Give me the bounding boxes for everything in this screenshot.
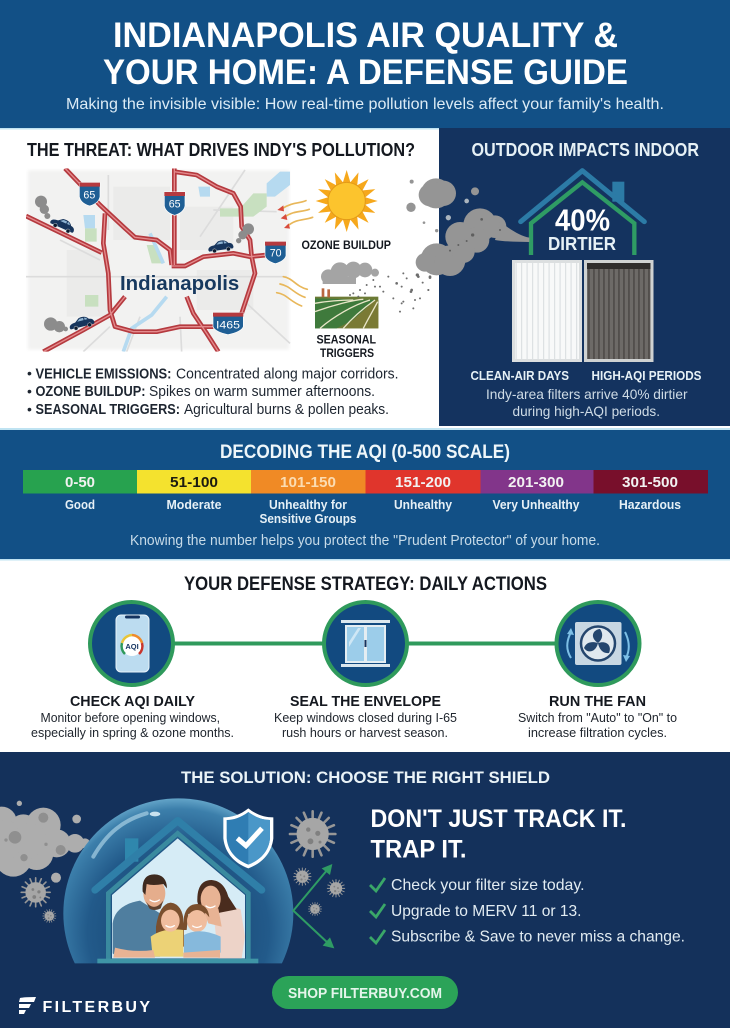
40% dirtier stat: 40% (555, 202, 610, 238)
connector line (170, 642, 560, 646)
icon: phone with AQI gauge: AQI (125, 642, 139, 651)
panel: outdoor impacts indoor (401, 128, 730, 426)
call to action headline: TRAP IT. (370, 836, 466, 864)
panel: the threat (0, 128, 439, 429)
button: shop filterbuy (272, 976, 458, 1009)
filter note: Indy-area filters arrive 40% dirtier (486, 386, 688, 402)
step description (518, 711, 677, 740)
panel: the solution (0, 752, 730, 1028)
icon: shield with check (223, 808, 273, 868)
AQI category labels: Good (65, 498, 95, 512)
family (113, 874, 245, 958)
step description (274, 711, 457, 740)
highway shields: 65 (169, 199, 181, 211)
step description: Monitor before opening windows, (40, 711, 220, 725)
AQI scale bar: 151-200 (395, 475, 451, 491)
AQI scale bar: 301-500 (622, 475, 678, 491)
city label: Indianapolis (120, 272, 239, 295)
call to action headline (370, 805, 626, 864)
seasonal triggers label: TRIGGERS (320, 346, 374, 360)
checklist: Check your filter size today. (391, 877, 584, 894)
cars with exhaust (35, 196, 254, 332)
title: YOUR HOME: A DEFENSE GUIDE (103, 53, 628, 92)
title (103, 16, 628, 92)
checklist (370, 877, 685, 946)
threat bullet list: • (27, 383, 32, 399)
highway shields (79, 183, 286, 335)
threat heading: THE THREAT: WHAT DRIVES INDY'S POLLUTION? (27, 140, 415, 160)
map of Indianapolis (26, 168, 290, 352)
subtitle: Making the invisible visible: How real-time pollution levels affect your family's health. (66, 96, 664, 113)
panel: decoding the AQI (0, 428, 730, 560)
threat bullet list: SEASONAL TRIGGERS: (36, 402, 180, 418)
icon: farm field with smoke (277, 262, 431, 328)
AQI category labels: Moderate (166, 498, 222, 512)
protective bubble with house and family (63, 798, 294, 964)
icon: sun with heat arrows (277, 169, 379, 233)
step title: SEAL THE ENVELOPE (290, 693, 441, 710)
AQI category labels: Unhealthy for (269, 498, 347, 512)
threat bullet list: Agricultural burns & pollen peaks. (184, 402, 389, 418)
step title: CHECK AQI DAILY (70, 693, 195, 710)
seasonal triggers label: SEASONAL (316, 332, 376, 346)
AQI heading: DECODING THE AQI (0-500 SCALE) (220, 442, 510, 463)
house (95, 821, 262, 963)
call to action headline: DON'T JUST TRACK IT. (370, 805, 626, 833)
icon: house outline (521, 171, 644, 255)
step description: especially in spring & ozone months. (31, 726, 234, 740)
filter captions (470, 368, 702, 383)
AQI scale bar: 201-300 (508, 475, 564, 491)
smoke cloud entering house (401, 178, 529, 309)
highway shields: 65 (83, 189, 95, 201)
40% dirtier stat: DIRTIER (548, 233, 616, 254)
highway shields: I465 (216, 319, 240, 331)
AQI category labels: Unhealthy (394, 498, 452, 512)
icon: fan (556, 602, 640, 685)
AQI category labels (65, 498, 681, 526)
filter captions: CLEAN-AIR DAYS (470, 368, 569, 383)
threat bullet list: VEHICLE EMISSIONS: (36, 366, 172, 382)
AQI category labels: Very Unhealthy (492, 498, 580, 512)
seasonal triggers label (316, 332, 376, 360)
step: check AQI (31, 602, 234, 740)
AQI scale bar: 0-50 (65, 475, 95, 491)
dirty filter (584, 260, 654, 362)
panel: daily actions (0, 559, 730, 752)
filter note (486, 386, 688, 419)
AQI scale bar: 101-150 (280, 475, 336, 491)
threat bullet list: • (27, 401, 32, 417)
icon: phone with AQI gauge (90, 602, 173, 685)
AQI category labels: Hazardous (619, 498, 681, 512)
highway shields: 70 (270, 248, 282, 260)
AQI scale bar: 51-100 (170, 475, 218, 491)
button: shop filterbuy: SHOP FILTERBUY.COM (288, 986, 442, 1002)
filter captions: HIGH-AQI PERIODS (592, 368, 702, 383)
logo: filterbuy: FILTERBUY (42, 999, 150, 1016)
title: INDIANAPOLIS AIR QUALITY & (113, 16, 618, 55)
step description: Keep windows closed during I-65 (274, 711, 457, 725)
threat bullet list: Spikes on warm summer afternoons. (149, 384, 375, 400)
step: run the fan (518, 602, 677, 740)
AQI category labels: Sensitive Groups (260, 512, 357, 526)
step description: increase filtration cycles. (528, 726, 667, 740)
step description: Switch from "Auto" to "On" to (518, 711, 677, 725)
threat bullet list: • (27, 365, 32, 381)
pollution cloud and particles (0, 801, 90, 923)
daily actions heading: YOUR DEFENSE STRATEGY: DAILY ACTIONS (184, 574, 547, 595)
threat bullet list (27, 365, 398, 418)
clean filter (512, 260, 582, 362)
step description (31, 711, 234, 740)
AQI scale bar (23, 470, 708, 494)
header band (0, 0, 730, 128)
40% dirtier stat (548, 202, 616, 254)
step: seal the envelope (274, 602, 457, 740)
threat bullet list: OZONE BUILDUP: (36, 384, 146, 400)
deflected viruses and arrows (290, 811, 345, 948)
threat bullet list: Concentrated along major corridors. (176, 366, 398, 382)
icon: window (324, 602, 407, 685)
outdoor heading: OUTDOOR IMPACTS INDOOR (472, 140, 699, 160)
ozone label: OZONE BUILDUP (302, 238, 391, 252)
filter note: during high-AQI periods. (512, 403, 660, 419)
step description: rush hours or harvest season. (282, 726, 448, 740)
solution heading: THE SOLUTION: CHOOSE THE RIGHT SHIELD (181, 768, 550, 787)
checklist: Upgrade to MERV 11 or 13. (391, 903, 582, 920)
glass bubble (63, 798, 294, 964)
checklist: Subscribe & Save to never miss a change. (391, 928, 685, 946)
AQI note: Knowing the number helps you protect the "Prudent Protector" of your home. (130, 533, 600, 549)
step title: RUN THE FAN (549, 693, 646, 710)
